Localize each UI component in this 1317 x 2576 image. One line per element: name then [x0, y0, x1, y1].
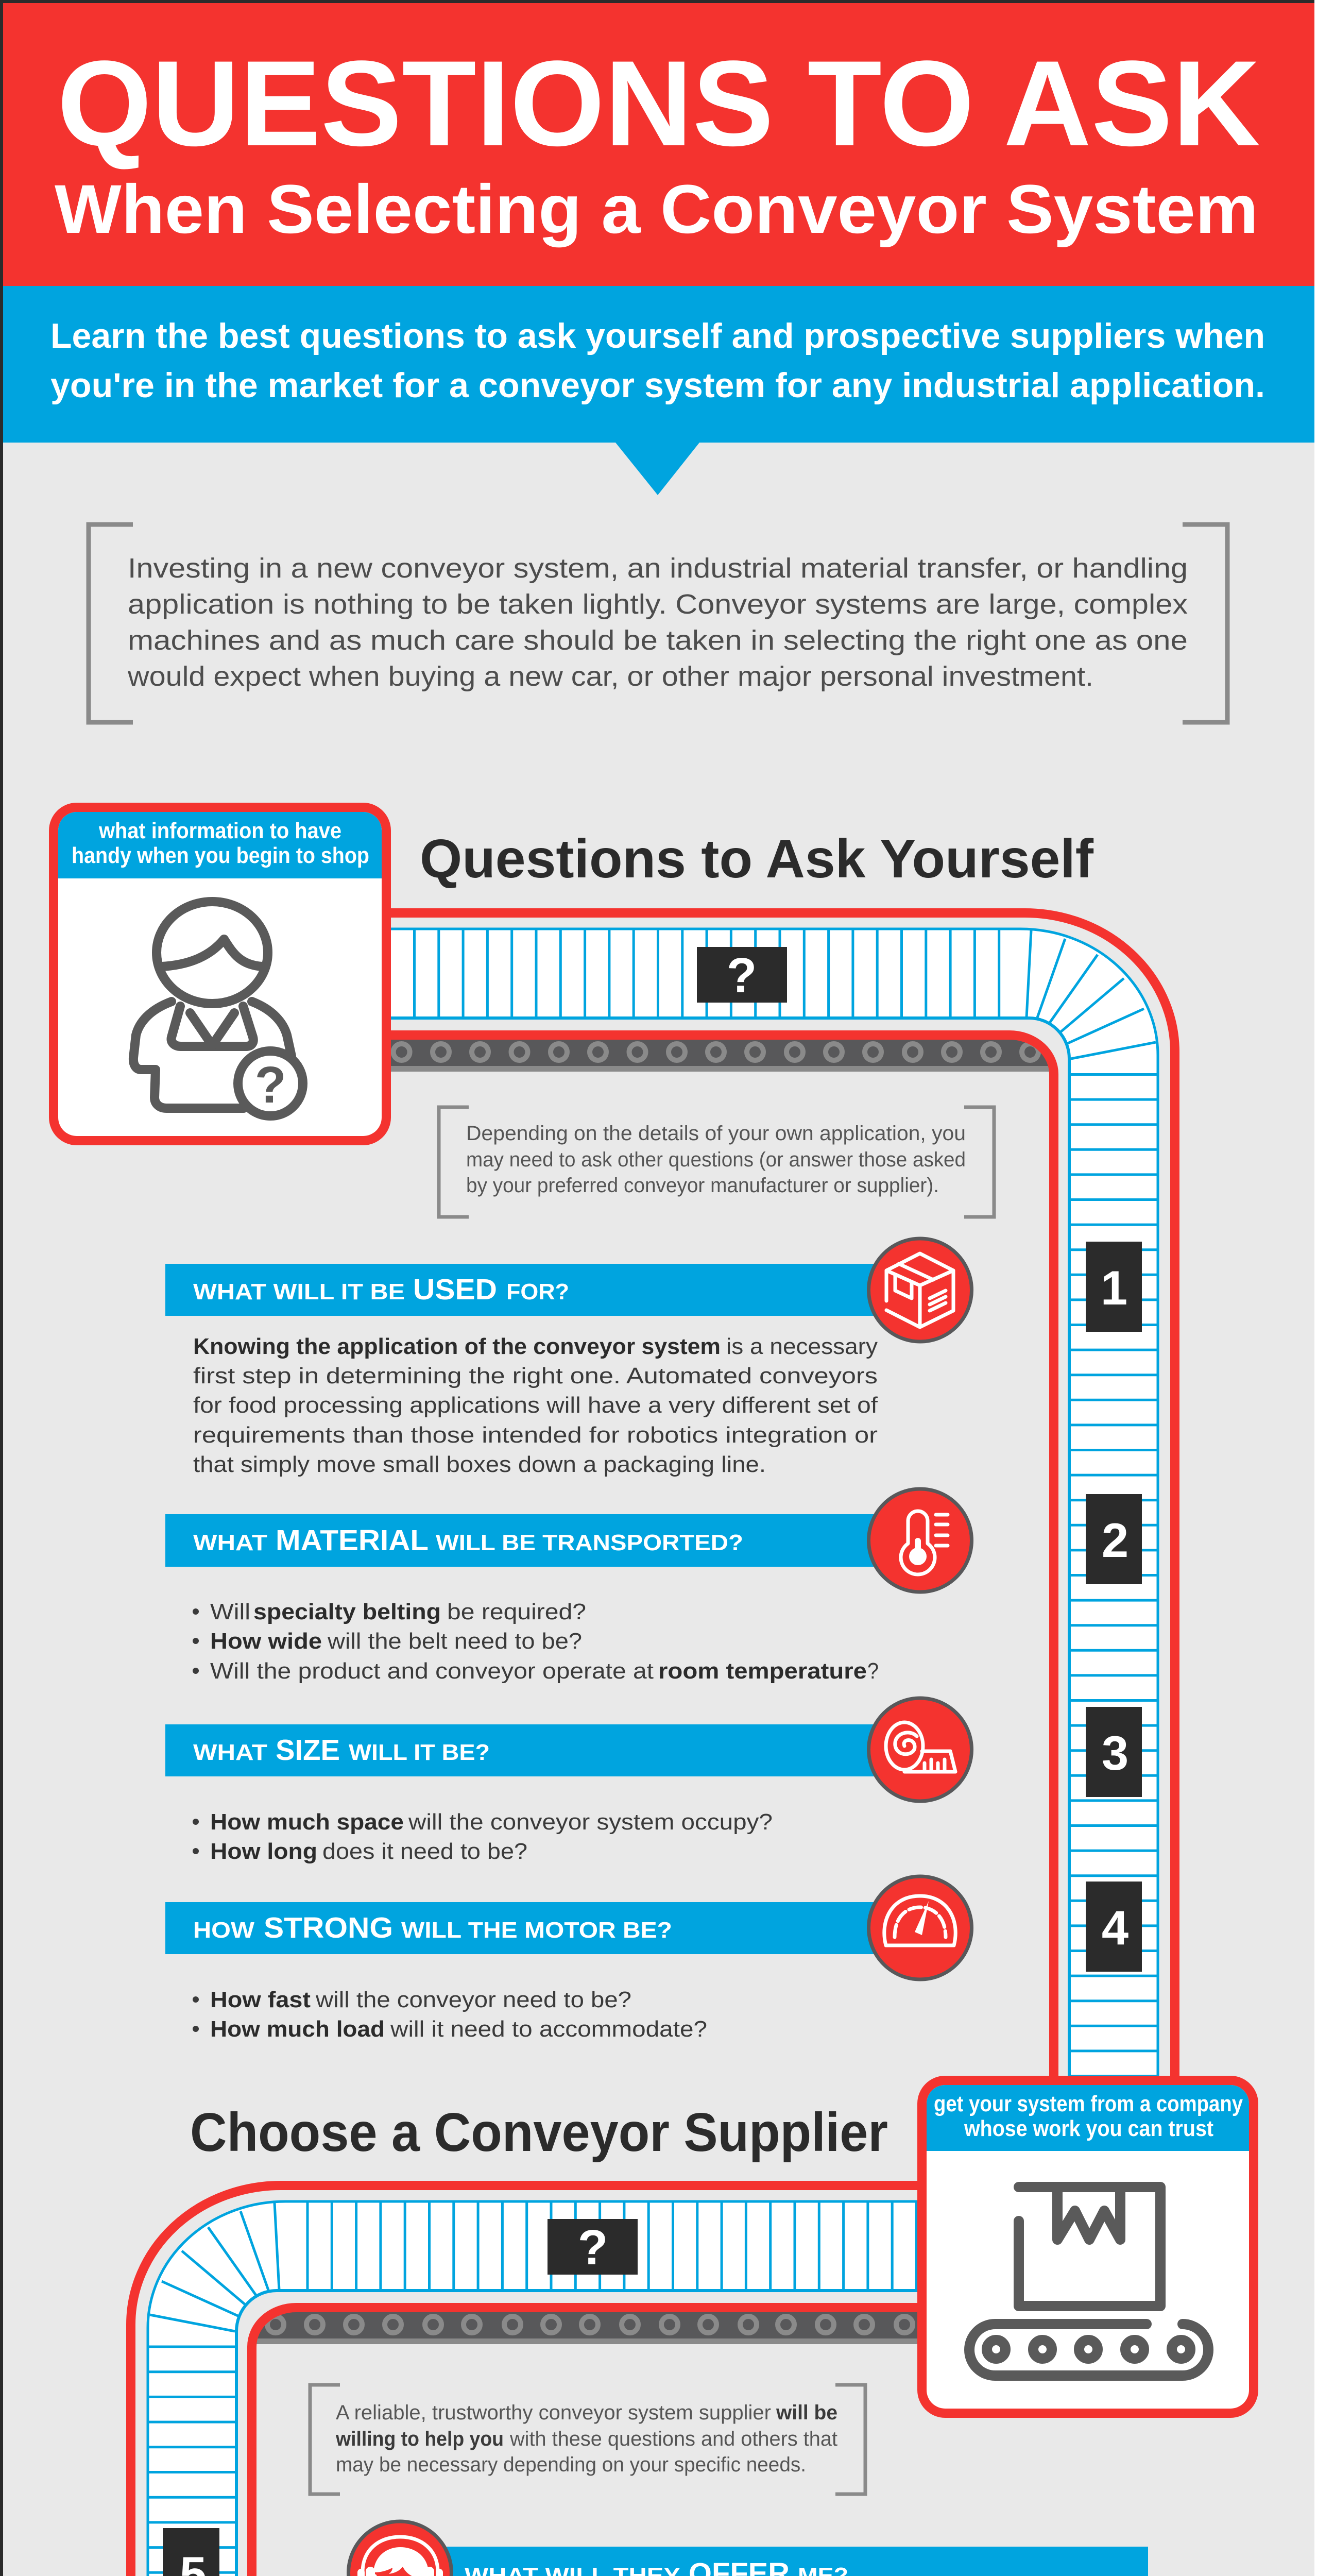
number 3 block [1086, 1707, 1142, 1797]
question mark block: second belt [548, 2219, 638, 2275]
icon: box on conveyor [969, 2187, 1208, 2376]
question 3: size: does it need to be? [322, 1839, 527, 1864]
intro blue banner with pointer: Learn the best questions to ask yourself and prospective suppliers when [50, 316, 1265, 355]
subtitle: When Selecting a Conveyor System [55, 171, 1258, 248]
number 1 block [1086, 1242, 1142, 1332]
question 2: material: WILL BE TRANSPORTED? [436, 1530, 743, 1555]
question mark block: second belt: ? [578, 2220, 608, 2275]
intro bracketed paragraph: application is nothing to be taken lightly. Conveyor systems are large, complex [128, 589, 1188, 620]
small bracketed note: second section [310, 2385, 865, 2494]
heading: Choose a Conveyor Supplier: Choose a Conveyor Supplier [190, 2102, 888, 2163]
intro bracketed paragraph: machines and as much care should be taken in selecting the right one as one [128, 625, 1188, 656]
number 1 block: 1 [1101, 1261, 1127, 1315]
question 4: motor: will it need to accommodate? [390, 2016, 707, 2042]
panel: company you can trust: whose work you can trust [964, 2116, 1213, 2141]
question 3: size: WHAT [193, 1740, 267, 1765]
intro blue banner with pointer [3, 286, 1314, 495]
icon: speedometer [868, 1876, 971, 1979]
question 1: used for: Knowing the application of the conveyor system [193, 1334, 721, 1359]
question 2: material: Will the product and conveyor operate at [210, 1658, 654, 1684]
question 3: size [165, 1698, 971, 1864]
question 2: material: MATERIAL [276, 1524, 429, 1557]
question 3: size: SIZE [276, 1734, 340, 1767]
question 1: used for: WHAT WILL IT BE [193, 1279, 405, 1304]
question 1: used for: requirements than those intended for robotics integration or [193, 1422, 878, 1448]
number 4 block [1086, 1882, 1142, 1972]
question 5: offer [348, 2521, 1149, 2576]
icon: package box [868, 1239, 971, 1342]
intro bracketed paragraph: would expect when buying a new car, or other major personal investment. [127, 661, 1093, 692]
question 4: motor: How fast [210, 1987, 311, 2012]
question 4: motor: STRONG [264, 1911, 393, 1944]
question 1: used for: FOR? [506, 1279, 569, 1304]
intro bracketed paragraph [89, 524, 1227, 722]
icon: headset agent [348, 2521, 451, 2576]
panel: company you can trust: get your system from a company [934, 2091, 1243, 2116]
question 1: used for: for food processing applications will have a very different set of [193, 1393, 878, 1418]
question 2: material: ? [867, 1658, 879, 1684]
panel: what information to have [49, 803, 391, 1145]
icon: person with question mark [133, 902, 303, 1116]
small bracketed note: first section [439, 1107, 994, 1217]
small bracketed note: first section: Depending on the details of your own application, you [466, 1122, 966, 1145]
question 1: used for: first step in determining the right one. Automated conveyors [193, 1363, 878, 1388]
question 1: used for: is a necessary [726, 1334, 878, 1359]
number 5 block [163, 2528, 219, 2576]
small bracketed note: second section: willing to help you [335, 2428, 504, 2450]
intro blue banner with pointer: you're in the market for a conveyor system for any industrial application. [50, 366, 1265, 405]
question 3: size: How long [210, 1839, 317, 1864]
panel: what information to have: ? [254, 1056, 286, 1114]
number 3 block: 3 [1102, 1726, 1128, 1780]
question 2: material: Will [210, 1599, 250, 1624]
small bracketed note: second section: may be necessary depending on your specific needs. [336, 2453, 806, 2476]
question 2: material: How wide [210, 1629, 322, 1654]
question 2: material [165, 1489, 971, 1684]
question 4: motor: How much load [210, 2016, 385, 2042]
header banner [3, 3, 1314, 286]
question 2: material: be required? [447, 1599, 586, 1624]
small bracketed note: first section: may need to ask other questions (or answer those asked [466, 1148, 966, 1171]
panel: what information to have: handy when you begin to shop [72, 843, 369, 868]
icon: thermometer [868, 1489, 971, 1592]
question 2: material: will the belt need to be? [327, 1629, 582, 1654]
number 4 block: 4 [1102, 1901, 1128, 1955]
small bracketed note: second section: with these questions and others that [509, 2428, 837, 2450]
question 3: size: WILL IT BE? [349, 1740, 490, 1765]
conveyor belt: second section [131, 2185, 917, 2576]
question 3: size: will the conveyor system occupy? [408, 1809, 773, 1835]
intro bracketed paragraph: Investing in a new conveyor system, an industrial material transfer, or handling [128, 553, 1188, 584]
icon: measuring tape [868, 1698, 971, 1801]
question mark block: first belt [697, 947, 787, 1003]
question 4: motor: HOW [193, 1918, 255, 1943]
question 3: size: How much space [210, 1809, 404, 1835]
small bracketed note: first section: by your preferred conveyor manufacturer or supplier). [466, 1174, 939, 1197]
title: QUESTIONS TO ASK [57, 36, 1260, 172]
question 4: motor: WILL THE MOTOR BE? [401, 1918, 672, 1943]
panel: what information to have: what information to have [98, 818, 341, 843]
question 2: material: WHAT [193, 1530, 267, 1555]
conveyor belt: first section [391, 913, 1175, 2076]
question 2: material: room temperature [658, 1658, 867, 1684]
question 4: motor [165, 1876, 971, 2042]
question mark block: first belt: ? [727, 948, 757, 1003]
question 4: motor: will the conveyor need to be? [315, 1987, 631, 2012]
question 2: material: specialty belting [253, 1599, 441, 1624]
question 1: used for: that simply move small boxes down a packaging line. [193, 1452, 766, 1477]
number 2 block: 2 [1102, 1513, 1128, 1567]
question 1: used for [165, 1239, 971, 1477]
panel: company you can trust [917, 2076, 1258, 2418]
small bracketed note: second section: A reliable, trustworthy conveyor system supplier [336, 2401, 771, 2424]
number 2 block [1086, 1494, 1142, 1584]
heading: Questions to Ask Yourself: Questions to Ask Yourself [420, 828, 1094, 889]
small bracketed note: second section: will be [776, 2401, 837, 2424]
question 1: used for: USED [413, 1273, 497, 1306]
